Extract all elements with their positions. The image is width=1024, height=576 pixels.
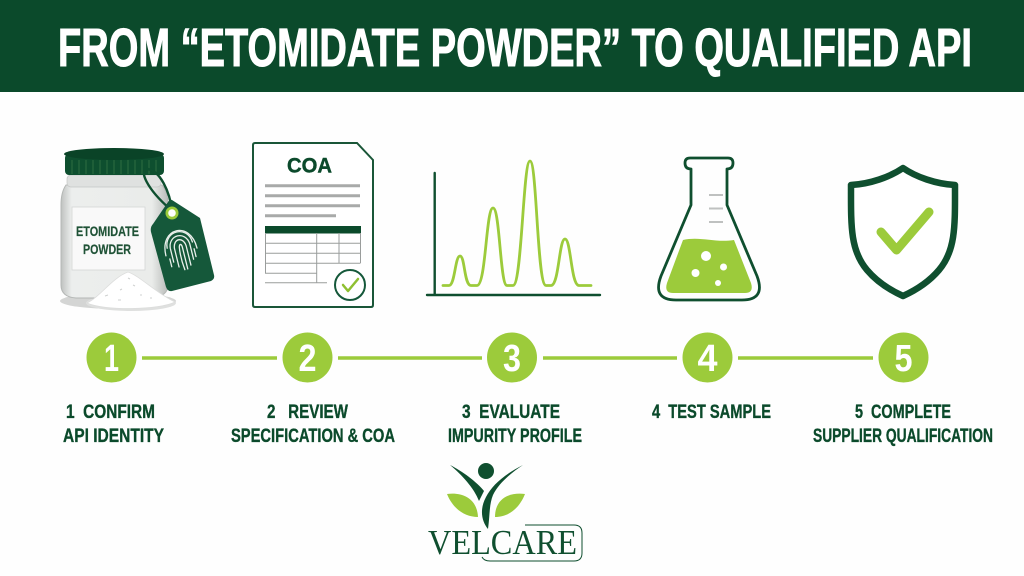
jar label: POWDER (83, 241, 131, 257)
Velcare logo (428, 463, 582, 562)
measure marks (709, 195, 723, 222)
step 1 label (63, 402, 164, 447)
text lines (265, 186, 360, 216)
step 5 badge (878, 332, 928, 382)
step 1 (63, 332, 164, 447)
step 4 (652, 332, 771, 423)
step 5 badge: 5 (894, 338, 912, 380)
fingerprint tag (151, 200, 214, 291)
step 3 badge: 3 (503, 338, 521, 380)
bubbles (692, 251, 727, 286)
step 5 (813, 332, 993, 447)
step 4 label: 4 TEST SAMPLE (652, 402, 771, 423)
step 1 label: API IDENTITY (63, 426, 164, 447)
check badge (335, 270, 365, 300)
jar label: ETOMIDATE (76, 223, 139, 239)
step 2 badge (282, 332, 332, 382)
jar label (72, 207, 145, 270)
icon: chromatogram chart (427, 161, 600, 295)
step 2 label (231, 402, 395, 447)
step 2 (231, 332, 395, 447)
timeline connectors (142, 356, 873, 360)
title banner (0, 0, 1024, 92)
chart axes (427, 173, 600, 295)
logo wordmark: VELCARE (428, 523, 577, 562)
COA heading: COA (287, 154, 332, 178)
flask liquid (666, 239, 752, 293)
logo frame (482, 525, 582, 561)
logo figure (450, 463, 523, 529)
jar lid (64, 148, 164, 175)
step 1 label: 1 CONFIRM (66, 402, 155, 423)
step 1 badge: 1 (104, 338, 119, 380)
fingerprint (161, 227, 201, 273)
step 4 badge: 4 (698, 338, 718, 380)
icon: etomidate powder jar with fingerprint tag (60, 148, 214, 311)
powder pile (86, 272, 176, 311)
step 5 label (813, 402, 993, 447)
step 2 badge: 2 (298, 338, 316, 380)
step 5 label: 5 COMPLETE (855, 402, 951, 423)
step 3 label: 3 EVALUATE (462, 402, 560, 423)
flask outline (659, 158, 759, 300)
icon: shield with check (851, 168, 955, 296)
icon: COA document (253, 143, 373, 307)
chromatogram peaks (443, 161, 591, 286)
step 3 label: IMPURITY PROFILE (448, 426, 582, 447)
table (265, 226, 361, 283)
step 3 label (448, 402, 582, 447)
logo leaves (447, 494, 525, 517)
step 2 label: 2 REVIEW (267, 402, 348, 423)
tag string (144, 169, 172, 211)
icon: flask (659, 158, 759, 300)
check mark (881, 212, 929, 250)
step 2 label: SPECIFICATION & COA (231, 426, 395, 447)
step 3 (448, 332, 582, 447)
